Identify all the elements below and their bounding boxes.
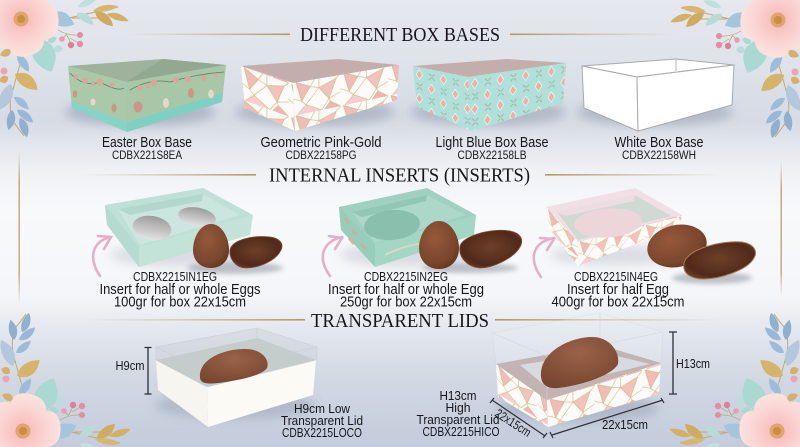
- panel: insert 3 with eggs: [546, 188, 682, 266]
- panel: Easter box base: [65, 59, 226, 132]
- icon: insert 1 egg holes: [131, 204, 217, 243]
- label: Easter box base: Easter Box Base: [102, 135, 192, 151]
- label: low lid: CDBX2215LOCO: [282, 425, 362, 440]
- label: low lid: Transparent Lid: [281, 413, 363, 428]
- panel: high lid box with egg: [492, 313, 663, 427]
- label: high lid: CDBX2215HICO: [422, 424, 500, 439]
- panel: insert 1 with eggs: [105, 188, 253, 267]
- label: White box base: CDBX22158WH: [622, 150, 696, 162]
- label: insert 1: CDBX2215IN1EG: [133, 269, 217, 284]
- arrow: pink insert 3: [534, 238, 554, 277]
- label: Light blue box base: Light Blue Box Base: [436, 135, 548, 151]
- label: insert 1: Insert for half or whole Eggs: [100, 281, 260, 298]
- label: White box base: White Box Base: [614, 135, 704, 151]
- heading: transparent lids: TRANSPARENT LIDS: [311, 310, 489, 332]
- dimension: width 22x15cm: [550, 398, 664, 438]
- dimension: depth 22x15cm: 22x15cm: [492, 406, 534, 440]
- panel: Geometric pink-gold box base: [235, 59, 399, 131]
- label: Easter box base: CDBX221S8EA: [112, 150, 182, 162]
- label: insert 3: [552, 269, 684, 310]
- icon: egg in high box: [541, 337, 618, 388]
- label: insert 2: [328, 269, 484, 310]
- floral corner: bottom right: [663, 305, 800, 447]
- icon: insert 3 egg hole: [573, 206, 643, 240]
- icon: chocolate eggs 2: [419, 221, 522, 273]
- dimension: depth 22x15cm: [490, 398, 547, 440]
- arrow: pink insert 1: [93, 236, 111, 276]
- panel: low lid box with egg: [155, 328, 317, 427]
- decoration: gold side rule left: [18, 150, 20, 305]
- label: Geometric pink-gold: [260, 135, 382, 162]
- dimension: H9cm: H9cm: [116, 359, 144, 373]
- label: insert 2: 250gr for box 22x15cm: [340, 294, 472, 310]
- floral corner: top left: [0, 0, 135, 145]
- label: insert 2: CDBX2215IN2EG: [364, 269, 448, 284]
- label: Easter box base: [102, 135, 192, 162]
- label: low lid: [281, 401, 363, 440]
- label: Geometric pink-gold: Geometric Pink-Gold: [260, 135, 382, 151]
- panel: Light blue box base: [410, 59, 566, 131]
- label: insert 3: CDBX2215IN4EG: [574, 269, 658, 284]
- label: insert 1: 100gr for box 22x15cm: [114, 294, 246, 310]
- heading: different box bases: DIFFERENT BOX BASES: [300, 24, 500, 46]
- heading: internal inserts: INTERNAL INSERTS (INSERTS): [269, 164, 530, 186]
- icon: insert 2 egg hole: [363, 208, 421, 242]
- label: high lid: Transparent Lid: [416, 412, 500, 427]
- dimension: width 22x15cm: 22x15cm: [602, 418, 648, 432]
- panel: White box base: [577, 59, 734, 131]
- dimension: H9cm: [116, 348, 152, 394]
- label: high lid: [416, 388, 500, 439]
- icon: chocolate eggs 3: [643, 219, 756, 284]
- panel: insert 2 with eggs: [339, 188, 480, 267]
- arrow: pink insert 2: [323, 236, 342, 276]
- icon: chocolate eggs 1: [187, 224, 283, 274]
- decoration: gold side rule right: [780, 160, 782, 298]
- floral corner: bottom left: [0, 305, 137, 447]
- label: Light blue box base: [436, 135, 548, 162]
- floral corner: top right: [664, 0, 800, 146]
- icon: egg in low box: [200, 349, 268, 383]
- label: high lid: High: [446, 400, 470, 415]
- label: Geometric pink-gold: CDBX22158PG: [286, 150, 357, 162]
- label: insert 3: 400gr for box 22x15cm: [552, 294, 684, 310]
- label: insert 2: Insert for half or whole Egg: [328, 281, 484, 298]
- label: low lid: H9cm Low: [294, 401, 351, 416]
- label: insert 1: [100, 269, 260, 310]
- label: high lid: H13cm: [440, 388, 476, 403]
- label: Light blue box base: CDBX22158LB: [458, 150, 527, 162]
- label: insert 3: Insert for half Egg: [567, 281, 669, 298]
- label: White box base: [614, 135, 704, 162]
- dimension: H13cm: [669, 332, 710, 394]
- dimension: H13cm: H13cm: [676, 357, 710, 371]
